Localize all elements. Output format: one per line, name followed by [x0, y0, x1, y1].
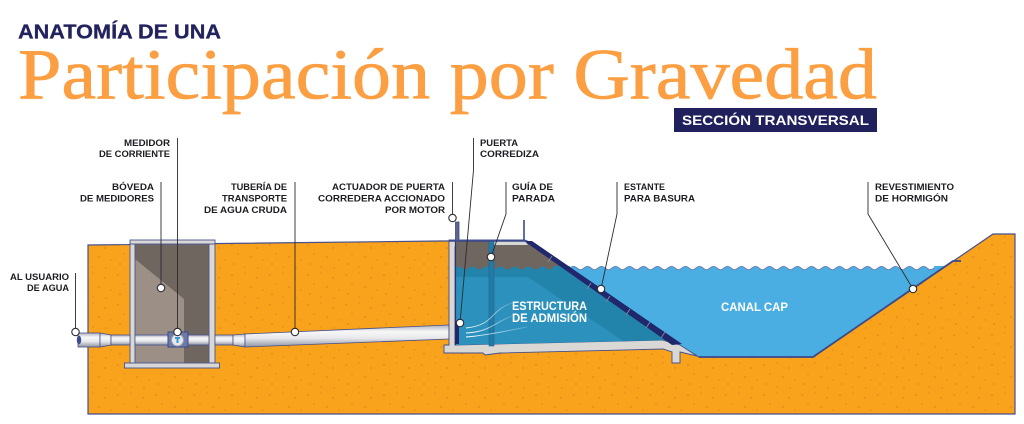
concrete lining of canal: [699, 261, 961, 357]
callout: puerta corrediza: CORREDIZA: [480, 148, 539, 159]
callout: tubería de transporte: TRANSPORTE: [222, 192, 287, 204]
water pipe: [77, 325, 449, 347]
callout: estante para basura: [597, 181, 695, 293]
intake label: DE ADMISIÓN: [512, 310, 587, 325]
ground cross-section: [88, 234, 1015, 414]
intake water: [455, 266, 672, 345]
badge: sección transversal: SECCIÓN TRANSVERSAL: [682, 111, 869, 128]
callout: medidor de corriente: DE CORRIENTE: [99, 148, 170, 159]
callout: actuador de puerta: [318, 181, 456, 222]
callout: revestimiento de hormigón: DE HORMIGÓN: [875, 192, 948, 204]
heading: anatomía de una: ANATOMÍA DE UNA: [18, 20, 221, 44]
callout: tubería de transporte: [204, 181, 299, 336]
badge: sección transversal: [674, 108, 877, 132]
intake structure: [444, 220, 697, 363]
gate actuator: [456, 222, 459, 241]
trash rack: [524, 241, 682, 345]
meter vault: [124, 240, 220, 368]
callout: puerta corrediza: PUERTA: [480, 137, 518, 148]
callout: estante para basura: PARA BASURA: [624, 192, 695, 204]
callout: puerta corrediza: [456, 137, 539, 327]
callout: revestimiento de hormigón: [868, 181, 954, 293]
callout: guía de parada: PARADA: [512, 192, 555, 204]
callout: bóveda de medidores: [80, 181, 165, 292]
callout: revestimiento de hormigón: REVESTIMIENTO: [875, 181, 954, 192]
callout: medidor de corriente: MEDIDOR: [124, 137, 170, 148]
railing: [523, 220, 525, 240]
callout: medidor de corriente: [99, 137, 181, 336]
callout: bóveda de medidores: BÓVEDA: [112, 181, 154, 192]
callout: tubería de transporte: DE AGUA CRUDA: [204, 204, 287, 215]
callout: al usuario de agua: DE AGUA: [27, 282, 69, 293]
stop guide: [489, 241, 494, 346]
canal label: CANAL CAP: [721, 300, 788, 314]
callout: actuador de puerta: CORREDERA ACCIONADO: [318, 192, 445, 204]
callout: bóveda de medidores: DE MEDIDORES: [80, 192, 154, 204]
concrete body: [444, 240, 697, 363]
callout: al usuario de agua: [10, 271, 79, 336]
sliding gate: [454, 241, 456, 345]
intake label: [512, 299, 587, 325]
canal water: [560, 262, 946, 356]
callout: guía de parada: [487, 181, 555, 261]
intake flow arrows: [466, 303, 527, 337]
intake label: ESTRUCTURA: [512, 299, 587, 313]
callout: guía de parada: GUÍA DE: [512, 181, 553, 192]
callout: actuador de puerta: ACTUADOR DE PUERTA: [332, 181, 445, 192]
callout: tubería de transporte: TUBERÍA DE: [231, 181, 287, 192]
title: Participación por Gravedad: [18, 34, 877, 114]
callout: estante para basura: ESTANTE: [624, 181, 665, 192]
dry chamber: [455, 241, 568, 269]
flow meter: [168, 332, 188, 347]
callout: actuador de puerta: POR MOTOR: [385, 204, 445, 215]
callout: al usuario de agua: AL USUARIO: [10, 271, 69, 282]
